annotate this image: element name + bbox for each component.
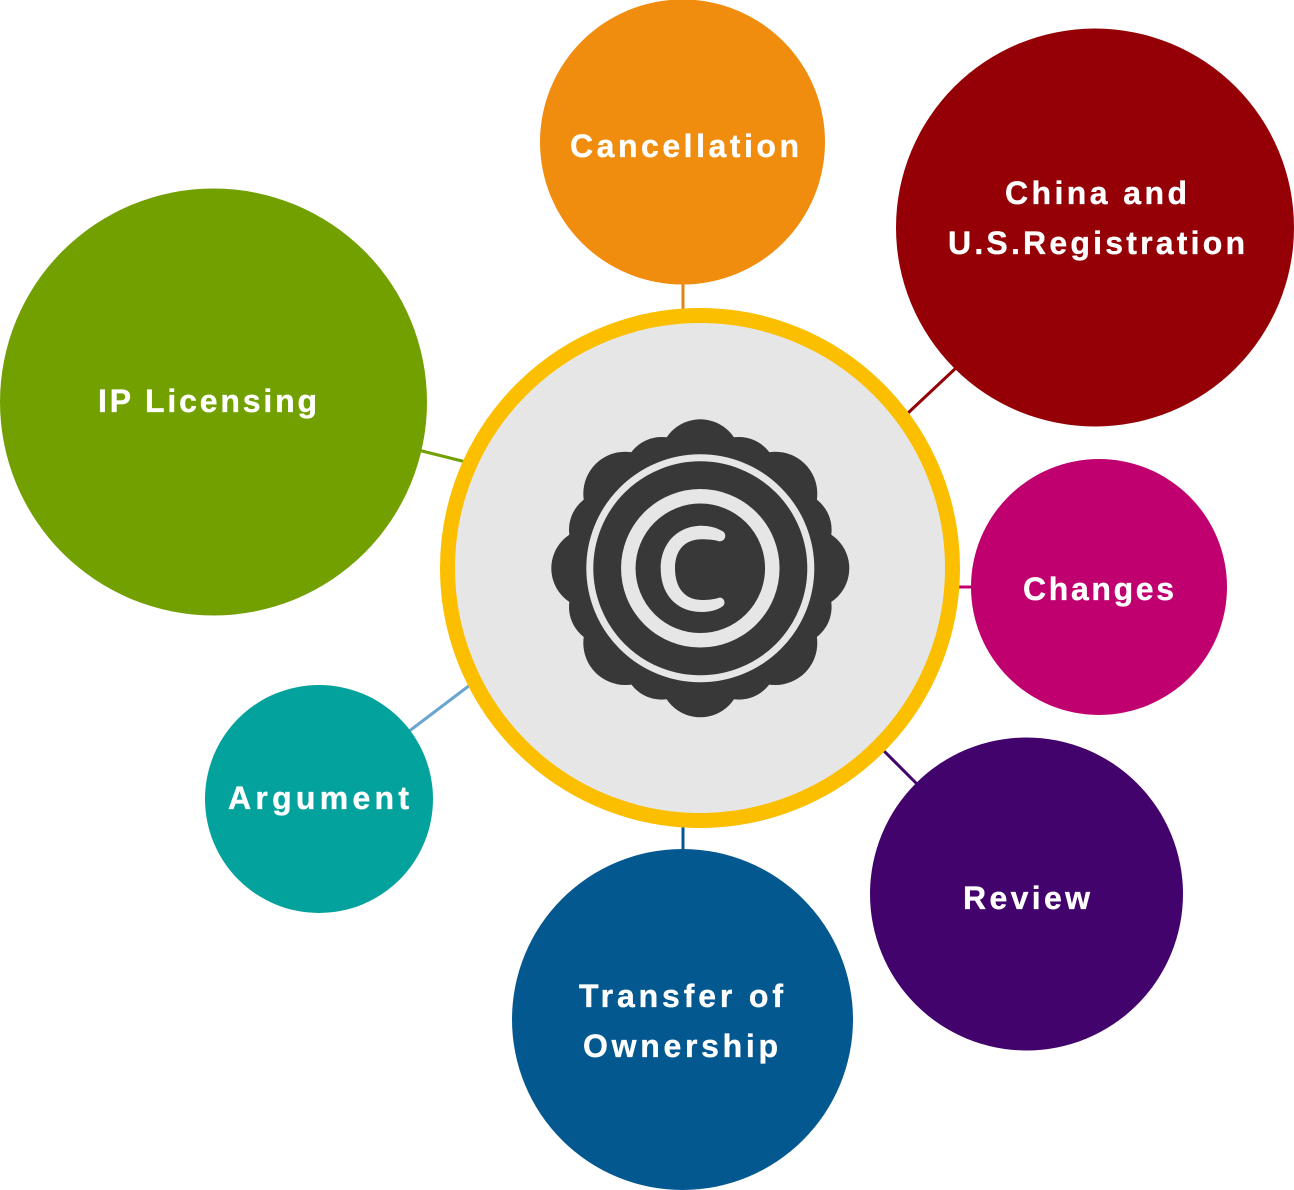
node: IP Licensing: IP Licensing	[98, 383, 317, 419]
node: Changes: Changes	[1023, 571, 1174, 607]
node: Argument	[205, 685, 433, 913]
node: China and U.S. Registration	[896, 28, 1294, 426]
connector: IP licensing	[418, 450, 466, 462]
icon: copyright seal	[551, 419, 849, 717]
node: China and U.S. Registration: U.S.Registration	[948, 225, 1245, 261]
node: Argument: Argument	[228, 780, 409, 816]
node: IP Licensing	[0, 188, 427, 616]
connector: argument	[408, 685, 470, 732]
node: Review	[870, 738, 1183, 1050]
connector: transfer of ownership	[682, 824, 684, 853]
connector: review	[883, 750, 918, 785]
node: China and U.S. Registration: China and	[1005, 175, 1187, 211]
node: Transfer of Ownership	[512, 849, 853, 1190]
connector: China and U.S. registration	[908, 367, 957, 413]
node: Changes	[971, 459, 1227, 715]
node: Transfer of Ownership: Transfer of	[579, 978, 783, 1014]
node: Transfer of Ownership: Ownership	[583, 1028, 778, 1064]
node: Cancellation	[540, 0, 825, 284]
node: Review: Review	[963, 880, 1090, 916]
connector: cancellation	[682, 280, 684, 312]
connector: changes	[955, 586, 975, 588]
central circle	[448, 316, 952, 820]
node: Cancellation: Cancellation	[570, 128, 799, 164]
